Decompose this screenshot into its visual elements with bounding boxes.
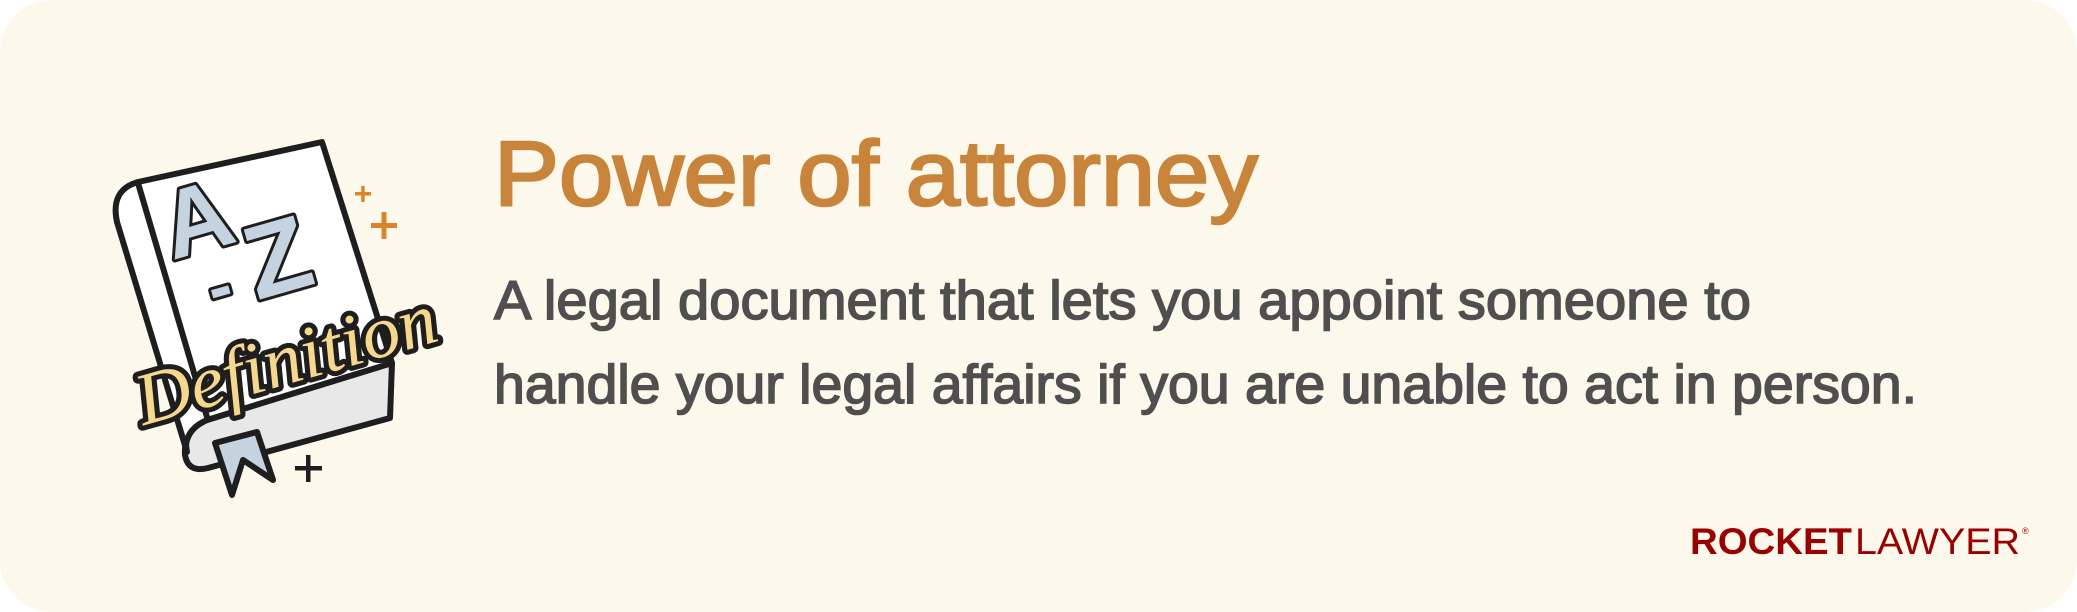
title: Power of attorney	[494, 123, 1258, 225]
book cover	[116, 142, 392, 452]
icon: definition book	[116, 141, 446, 495]
definition text: A legal document that lets you appoint someone to	[494, 269, 1751, 331]
letters A - Z: -	[197, 246, 241, 327]
book pages block	[185, 363, 392, 469]
letters A - Z	[149, 141, 324, 342]
icon: sparkles	[355, 186, 397, 239]
definition text	[494, 269, 1917, 415]
logo: Rocket Lawyer: ROCKET	[1690, 521, 1852, 562]
Definition script text: Definition	[125, 278, 446, 442]
spine line	[138, 183, 207, 417]
bookmark	[215, 432, 273, 495]
logo: Rocket Lawyer: ®	[2022, 526, 2029, 536]
definition text: handle your legal affairs if you are unable to act in person.	[494, 353, 1917, 415]
logo: Rocket Lawyer: LAWYER	[1855, 521, 2020, 562]
letters A - Z: Z	[231, 194, 324, 323]
icon: black plus	[295, 455, 322, 482]
letters A - Z: A	[149, 158, 245, 280]
logo: Rocket Lawyer	[1690, 521, 2029, 562]
